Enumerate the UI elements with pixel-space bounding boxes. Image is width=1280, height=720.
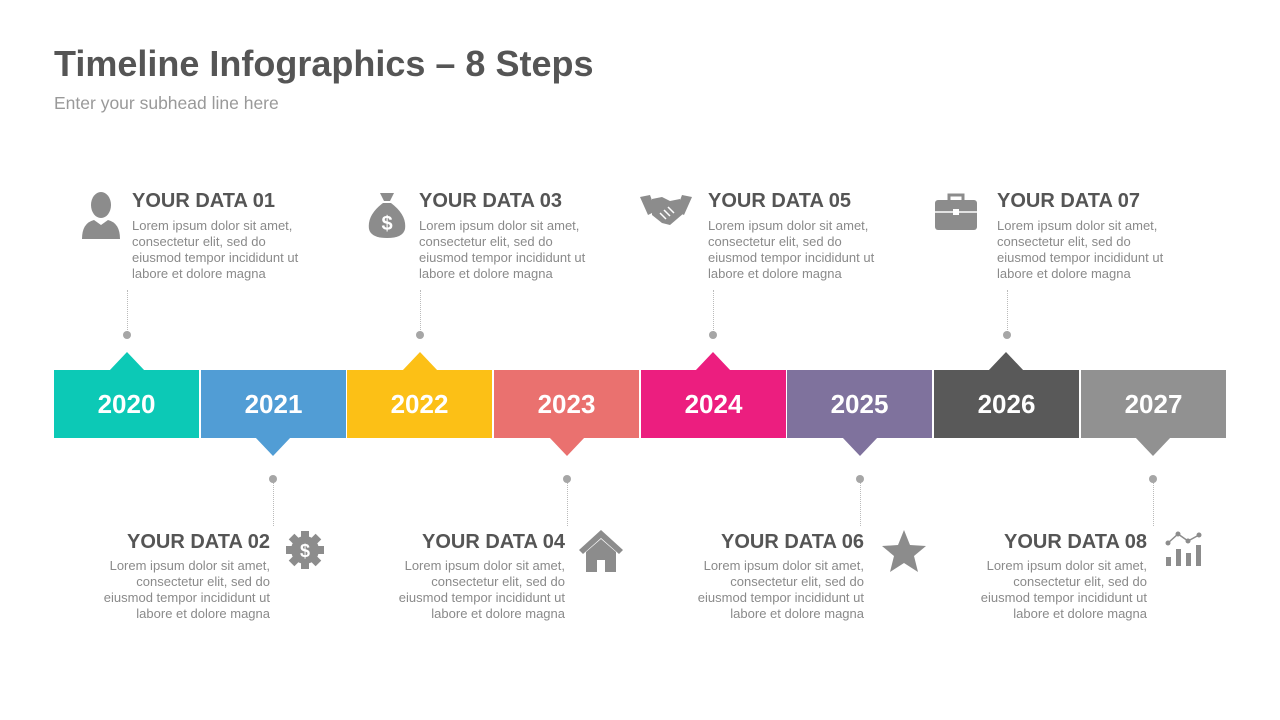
step 01: YOUR DATA 01 <box>132 190 275 212</box>
step 08: Lorem ipsum dolor sit amet, <box>987 558 1147 573</box>
step 07: consectetur elit, sed do <box>997 234 1131 249</box>
pointer 2026 <box>989 352 1023 370</box>
segment 2027: 2027 <box>1125 389 1182 419</box>
step 02 <box>104 531 324 621</box>
segment 2024: 2024 <box>685 389 742 419</box>
pointer 2020 <box>110 352 144 370</box>
segment 2020 <box>54 370 199 438</box>
segment 2026: 2026 <box>978 389 1035 419</box>
step 03 <box>368 190 586 281</box>
step 02: labore et dolore magna <box>136 606 270 621</box>
step 05: YOUR DATA 05 <box>708 190 851 212</box>
icon: gear <box>286 531 324 569</box>
step 01: consectetur elit, sed do <box>132 234 266 249</box>
segment 2023: 2023 <box>538 389 595 419</box>
step 07 <box>935 190 1164 281</box>
segment 2026 <box>934 370 1079 438</box>
step 05: consectetur elit, sed do <box>708 234 842 249</box>
step 05 <box>640 190 874 281</box>
segment 2022: 2022 <box>391 389 448 419</box>
icon: briefcase <box>935 194 977 230</box>
step 07: YOUR DATA 07 <box>997 190 1140 212</box>
segment 2021 <box>201 370 346 438</box>
segment 2022 <box>347 370 492 438</box>
icon: handshake <box>640 195 692 225</box>
step 06: Lorem ipsum dolor sit amet, <box>704 558 864 573</box>
step 02: YOUR DATA 02 <box>127 531 270 553</box>
icon: money bag: $ <box>381 213 393 235</box>
segment 2025: 2025 <box>831 389 888 419</box>
segment 2024 <box>641 370 786 438</box>
step 01: eiusmod tempor incididunt ut <box>132 250 298 265</box>
step 04 <box>399 530 623 621</box>
step 04: YOUR DATA 04 <box>422 531 565 553</box>
icon: house <box>579 530 623 572</box>
icon: money bag <box>368 193 406 238</box>
step 08 <box>981 531 1202 621</box>
step 03: YOUR DATA 03 <box>419 190 562 212</box>
step 03: labore et dolore magna <box>419 266 553 281</box>
step 04: eiusmod tempor incididunt ut <box>399 590 565 605</box>
step 01: labore et dolore magna <box>132 266 266 281</box>
segment 2020: 2020 <box>98 389 155 419</box>
step 08: YOUR DATA 08 <box>1004 531 1147 553</box>
step 05: labore et dolore magna <box>708 266 842 281</box>
step 06: labore et dolore magna <box>730 606 864 621</box>
title: Timeline Infographics – 8 Steps <box>54 43 594 84</box>
step 06: consectetur elit, sed do <box>730 574 864 589</box>
step 05: Lorem ipsum dolor sit amet, <box>708 218 868 233</box>
pointer 2021 <box>256 438 290 456</box>
step 04: labore et dolore magna <box>431 606 565 621</box>
step 03: eiusmod tempor incididunt ut <box>419 250 585 265</box>
subtitle: Enter your subhead line here <box>54 93 279 113</box>
step 06 <box>698 530 926 621</box>
pointer 2025 <box>843 438 877 456</box>
pointer 2022 <box>403 352 437 370</box>
step 03: consectetur elit, sed do <box>419 234 553 249</box>
icon: chart <box>1166 532 1202 566</box>
icon: star <box>882 530 926 572</box>
step 04: Lorem ipsum dolor sit amet, <box>405 558 565 573</box>
step 07: eiusmod tempor incididunt ut <box>997 250 1163 265</box>
timeline bar <box>110 352 1170 456</box>
step 03: Lorem ipsum dolor sit amet, <box>419 218 579 233</box>
segment 2025 <box>787 370 932 438</box>
step 01: Lorem ipsum dolor sit amet, <box>132 218 292 233</box>
step 02: eiusmod tempor incididunt ut <box>104 590 270 605</box>
step 06: YOUR DATA 06 <box>721 531 864 553</box>
step 02: consectetur elit, sed do <box>136 574 270 589</box>
pointer 2027 <box>1136 438 1170 456</box>
segment 2023 <box>494 370 639 438</box>
step 07: labore et dolore magna <box>997 266 1131 281</box>
step 06: eiusmod tempor incididunt ut <box>698 590 864 605</box>
pointer 2023 <box>550 438 584 456</box>
icon: gear: $ <box>300 541 310 561</box>
pointer 2024 <box>696 352 730 370</box>
step 08: eiusmod tempor incididunt ut <box>981 590 1147 605</box>
step 07: Lorem ipsum dolor sit amet, <box>997 218 1157 233</box>
step 01 <box>82 190 298 281</box>
step 08: labore et dolore magna <box>1013 606 1147 621</box>
step 05: eiusmod tempor incididunt ut <box>708 250 874 265</box>
segment 2027 <box>1081 370 1226 438</box>
segment 2021: 2021 <box>245 389 302 419</box>
step 04: consectetur elit, sed do <box>431 574 565 589</box>
icon: person <box>82 192 120 239</box>
step 08: consectetur elit, sed do <box>1013 574 1147 589</box>
step 02: Lorem ipsum dolor sit amet, <box>110 558 270 573</box>
